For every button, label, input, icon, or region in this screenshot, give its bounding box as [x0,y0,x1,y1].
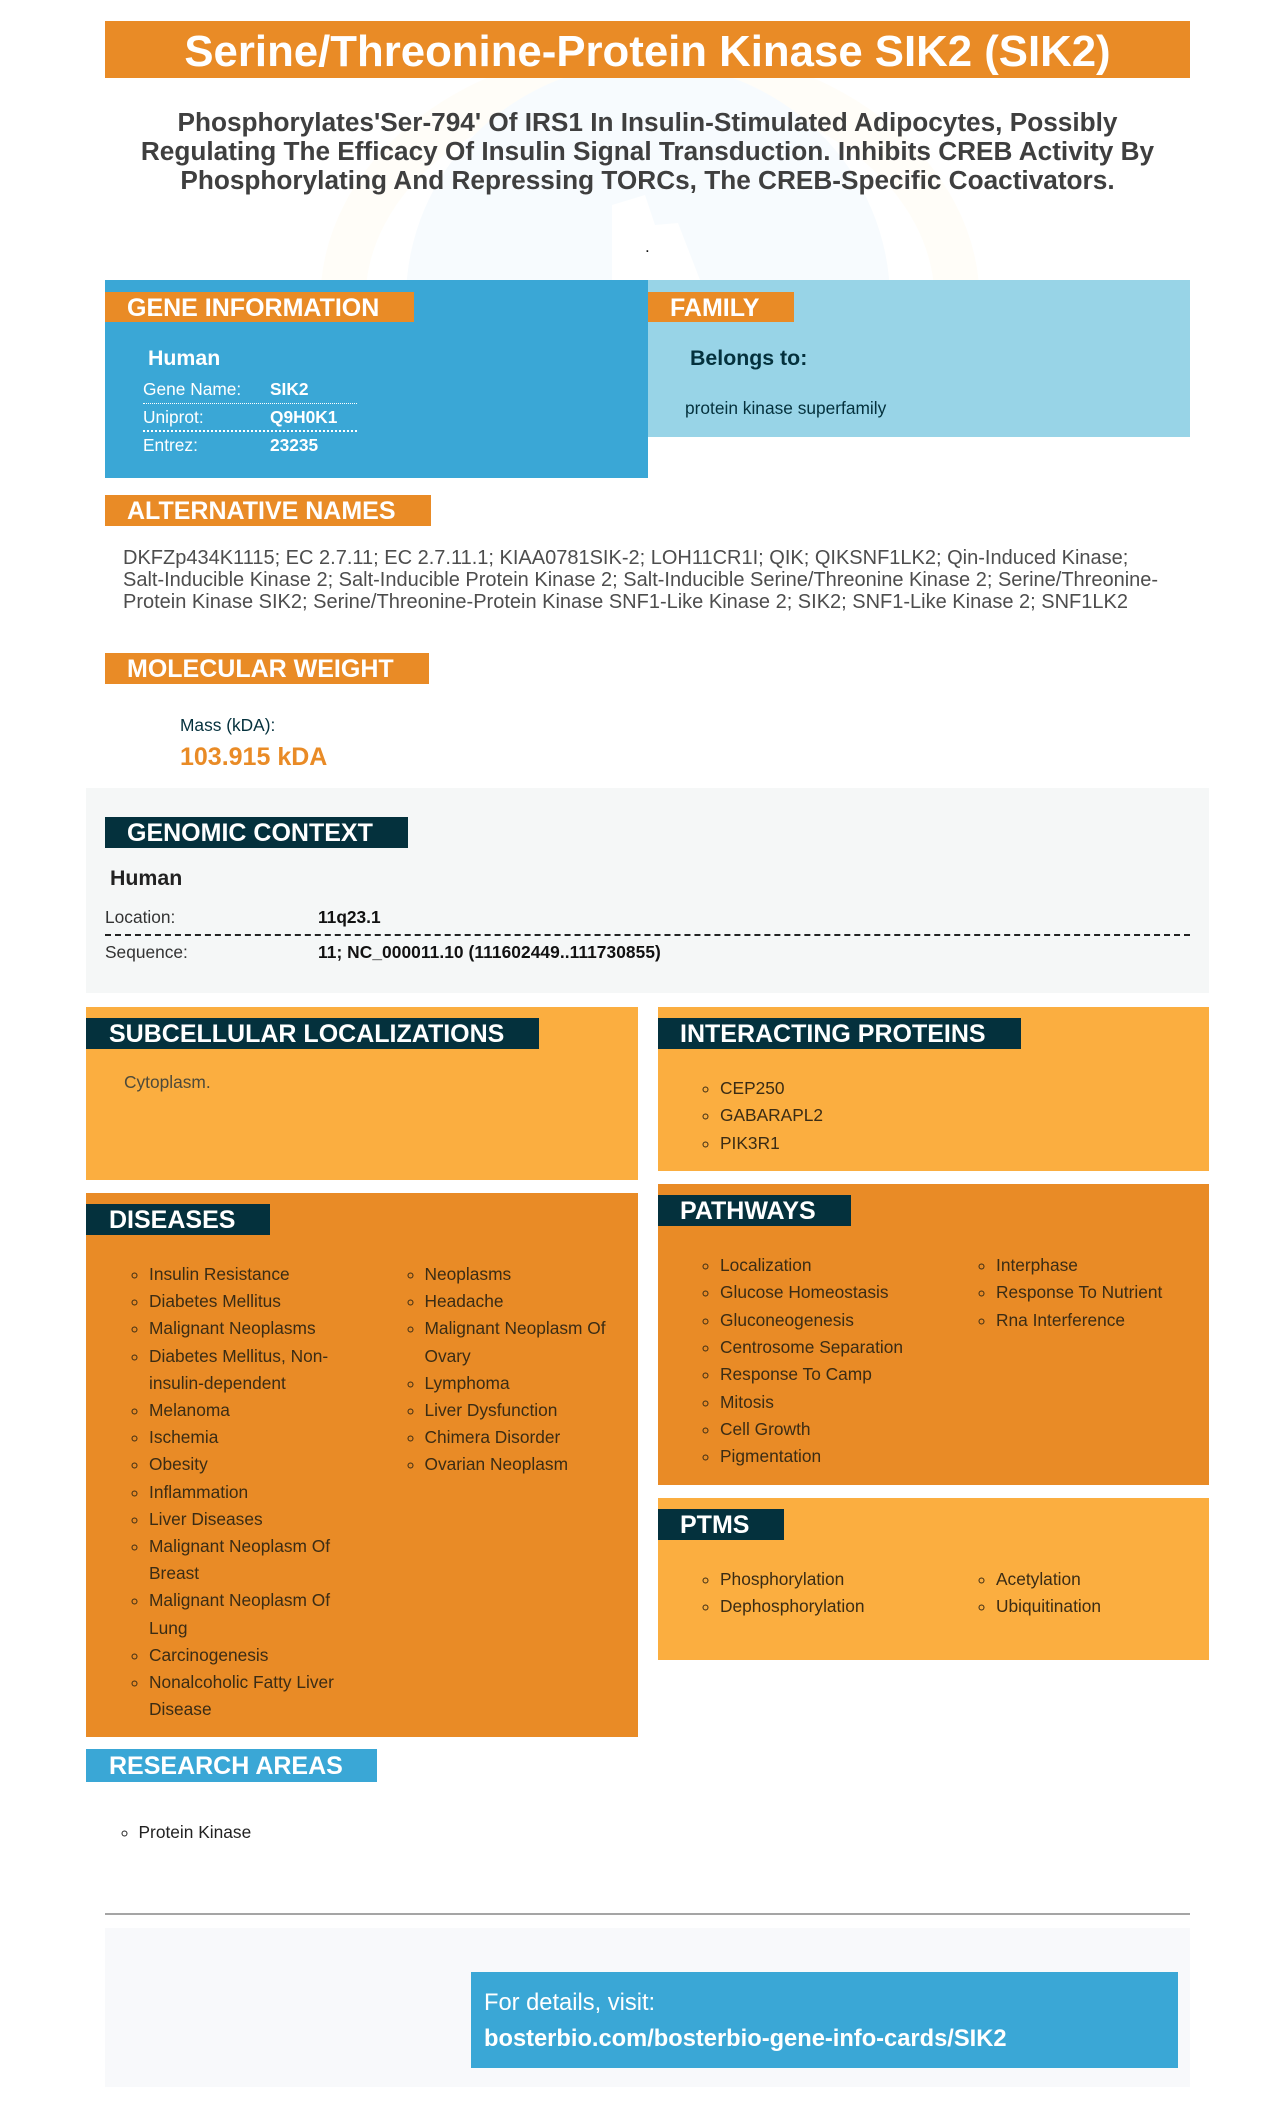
research area list: Protein Kinase [138,1822,251,1842]
entrez row: 23235 [270,435,318,455]
disease list column 1: Diabetes Mellitus [149,1291,281,1311]
heading: pathways [658,1195,851,1226]
species label: Human [110,866,182,890]
panel: diseases [86,1193,638,1737]
pathway list column 1: Localization [720,1255,812,1275]
disease list column 1: Nonalcoholic Fatty Liver [149,1672,334,1692]
panel: interacting proteins [658,1007,1209,1171]
pathway list column 1: Mitosis [720,1392,774,1412]
entrez row [143,435,318,455]
ptm list column 1: Dephosphorylation [720,1596,864,1616]
panel: ptms [658,1498,1209,1660]
family value: protein kinase superfamily [685,398,886,418]
disease list column 1 [132,1264,334,1719]
heading: pathways: PATHWAYS [680,1197,816,1225]
location row [105,907,381,927]
ptm list column 2 [978,1569,1101,1616]
heading: gene information: GENE INFORMATION [127,294,379,322]
pathway list column 2: Interphase [996,1255,1078,1275]
heading: research areas [86,1749,377,1782]
disease list column 2 [408,1264,606,1474]
ptm list column 1 [702,1569,864,1616]
gene name row [143,379,309,399]
disease list column 1: Lung [149,1618,188,1638]
alternative names text: Protein Kinase SIK2; Serine/Threonine-Protein Kinase SNF1-Like Kinase 2; SIK2; SNF1-Like Kinase 2; SNF1LK2 [123,591,1128,613]
disease list column 1: Insulin Resistance [149,1264,290,1284]
uniprot row: Q9H0K1 [270,407,337,427]
heading: ptms: PTMS [680,1511,749,1539]
disease list column 1: Liver Diseases [149,1509,263,1529]
heading: research areas: RESEARCH AREAS [109,1752,343,1780]
panel: genomic context [86,788,1209,993]
pathway list column 1 [702,1255,903,1466]
disease list column 2: Chimera Disorder [424,1427,560,1447]
disease list column 1: Ischemia [149,1427,218,1447]
sequence row: 11; NC_000011.10 (111602449..111730855) [318,942,661,962]
alternative names text: Salt-Inducible Kinase 2; Salt-Inducible Protein Kinase 2; Salt-Inducible Serine/Threonine Kinase 2; Serine/Threonine- [123,569,1158,591]
sequence row: Sequence: [105,942,188,962]
subtitle description: Phosphorylating And Repressing TORCs, The CREB-Specific Coactivators. [180,165,1115,195]
background watermark logo [0,0,1288,280]
disease list column 1: Disease [149,1699,212,1719]
protein list: GABARAPL2 [720,1105,823,1125]
belongs to label: Belongs to: [690,346,807,370]
center dot: . [645,237,650,256]
gene name row: Gene Name: [143,379,241,399]
ptm list column 2: Ubiquitination [996,1596,1101,1616]
pathway list column 1: Glucose Homeostasis [720,1282,889,1302]
ptm list column 1: Phosphorylation [720,1569,844,1589]
protein list: CEP250 [720,1078,785,1098]
heading: interacting proteins: INTERACTING PROTEINS [680,1020,986,1048]
disease list column 2: Headache [424,1291,504,1311]
alternative names text [123,547,1158,613]
protein list: PIK3R1 [720,1133,780,1153]
sequence row [105,942,661,962]
entrez row: Entrez: [143,435,198,455]
localization text: Cytoplasm. [124,1072,211,1092]
disease list column 2: Ovarian Neoplasm [424,1454,568,1474]
mass value: 103.915 kDA [180,743,327,771]
location row: Location: [105,907,175,927]
details url: bosterbio.com/bosterbio-gene-info-cards/SIK2 [484,2026,1007,2052]
pathway list column 1: Pigmentation [720,1446,821,1466]
ptm list column 2: Acetylation [996,1569,1081,1589]
uniprot row: Uniprot: [143,407,204,427]
heading: ptms [658,1509,784,1540]
disease list column 1: Malignant Neoplasm Of [149,1590,330,1610]
disease list column 2: Ovary [424,1346,471,1366]
heading: family: FAMILY [670,294,759,322]
disease list column 2: Lymphoma [424,1373,510,1393]
footer panel [105,1928,1190,2087]
heading: alternative names: ALTERNATIVE NAMES [127,497,396,525]
heading: family [648,292,794,322]
mass label: Mass (kDA): [180,715,275,735]
heading: genomic context: GENOMIC CONTEXT [127,819,373,847]
pathway list column 1: Gluconeogenesis [720,1310,854,1330]
disease list column 1: Malignant Neoplasm Of [149,1536,330,1556]
subtitle description [141,107,1154,195]
title banner: Serine/Threonine-Protein Kinase SIK2 (SIK2) [184,27,1111,76]
pathway list column 2: Rna Interference [996,1310,1125,1330]
subtitle description: Phosphorylates'Ser-794' Of IRS1 In Insulin-Stimulated Adipocytes, Possibly [178,107,1117,137]
callout: details link [471,1972,1178,2068]
pathway list column 2: Response To Nutrient [996,1282,1162,1302]
panel: research areas [86,1749,377,1842]
heading: diseases: DISEASES [109,1206,235,1234]
disease list column 2: Malignant Neoplasm Of [424,1318,606,1338]
disease list column 1: Inflammation [149,1482,248,1502]
pathway list column 1: Cell Growth [720,1419,811,1439]
disease list column 1: Obesity [149,1454,208,1474]
panel: family [648,280,1190,437]
disease list column 1: Diabetes Mellitus, Non- [149,1346,328,1366]
disease list column 2: Liver Dysfunction [424,1400,557,1420]
protein list [702,1078,823,1153]
panel: pathways [658,1184,1209,1485]
pathway list column 2 [978,1255,1162,1330]
heading: molecular weight: MOLECULAR WEIGHT [127,655,394,683]
pathway list column 1: Centrosome Separation [720,1337,903,1357]
disease list column 1: Carcinogenesis [149,1645,268,1665]
disease list column 1: Malignant Neoplasms [149,1318,316,1338]
disease list column 1: insulin-dependent [149,1373,286,1393]
species label: Human [148,346,220,370]
heading: subcellular localizations: SUBCELLULAR LOCALIZATIONS [109,1020,504,1048]
alternative names text: DKFZp434K1115; EC 2.7.11; EC 2.7.11.1; KIAA0781SIK-2; LOH11CR1I; QIK; QIKSNF1LK2; Qin-Induced Kinase; [123,547,1128,569]
location row: 11q23.1 [318,907,381,927]
disease list column 2: Neoplasms [424,1264,511,1284]
disease list column 1: Melanoma [149,1400,230,1420]
details label: For details, visit: [484,1990,655,2016]
disease list column 1: Breast [149,1563,199,1583]
gene name row: SIK2 [270,379,309,399]
uniprot row [143,407,337,427]
heading: diseases [86,1204,270,1235]
panel: gene information [105,280,648,478]
panel: subcellular localizations [86,1007,638,1180]
subtitle description: Regulating The Efficacy Of Insulin Signal Transduction. Inhibits CREB Activity By [141,136,1154,166]
pathway list column 1: Response To Camp [720,1364,872,1384]
